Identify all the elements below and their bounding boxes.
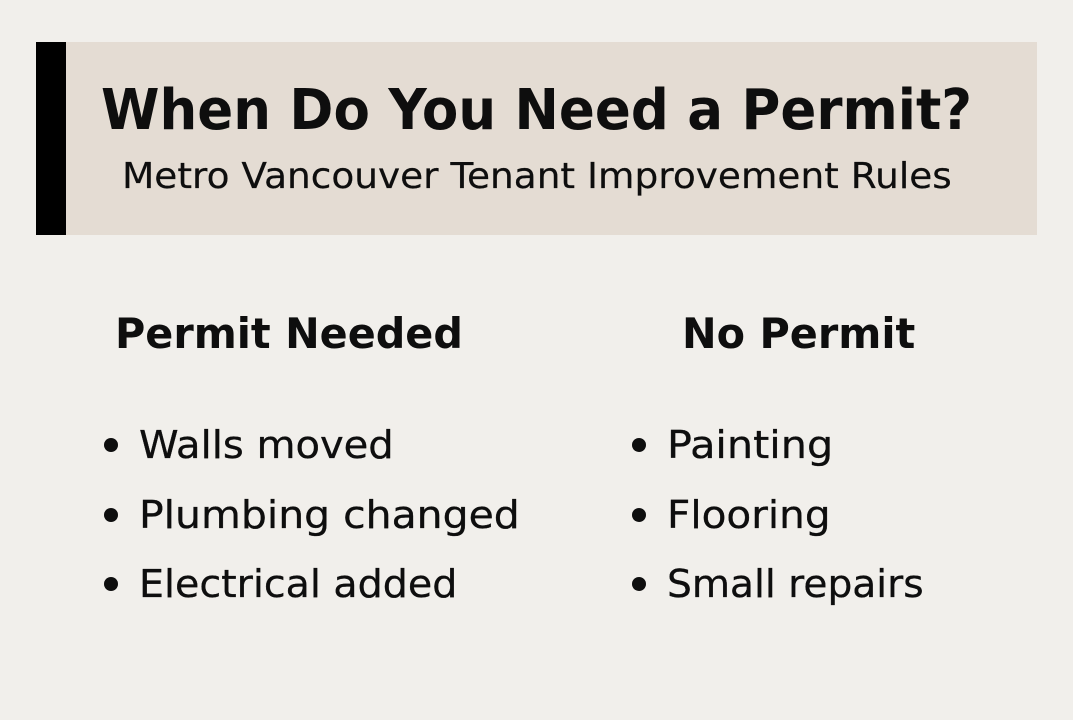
heading: no permit: No Permit — [682, 309, 915, 358]
list item: plumbing changed: Plumbing changed — [139, 493, 520, 537]
panel: permit needed — [104, 309, 520, 606]
panel: no permit — [632, 309, 924, 606]
list item: walls moved: Walls moved — [139, 423, 394, 467]
black accent bar — [36, 42, 66, 235]
header banner — [36, 42, 1037, 235]
list item: electrical added: Electrical added — [139, 562, 457, 606]
heading: permit needed: Permit Needed — [115, 309, 463, 358]
list item: painting: Painting — [667, 423, 833, 467]
subtitle: Metro Vancouver Tenant Improvement Rules — [122, 156, 952, 197]
list item: small repairs: Small repairs — [667, 562, 924, 606]
list item: flooring: Flooring — [667, 493, 831, 537]
title: When Do You Need a Permit? — [101, 78, 972, 143]
